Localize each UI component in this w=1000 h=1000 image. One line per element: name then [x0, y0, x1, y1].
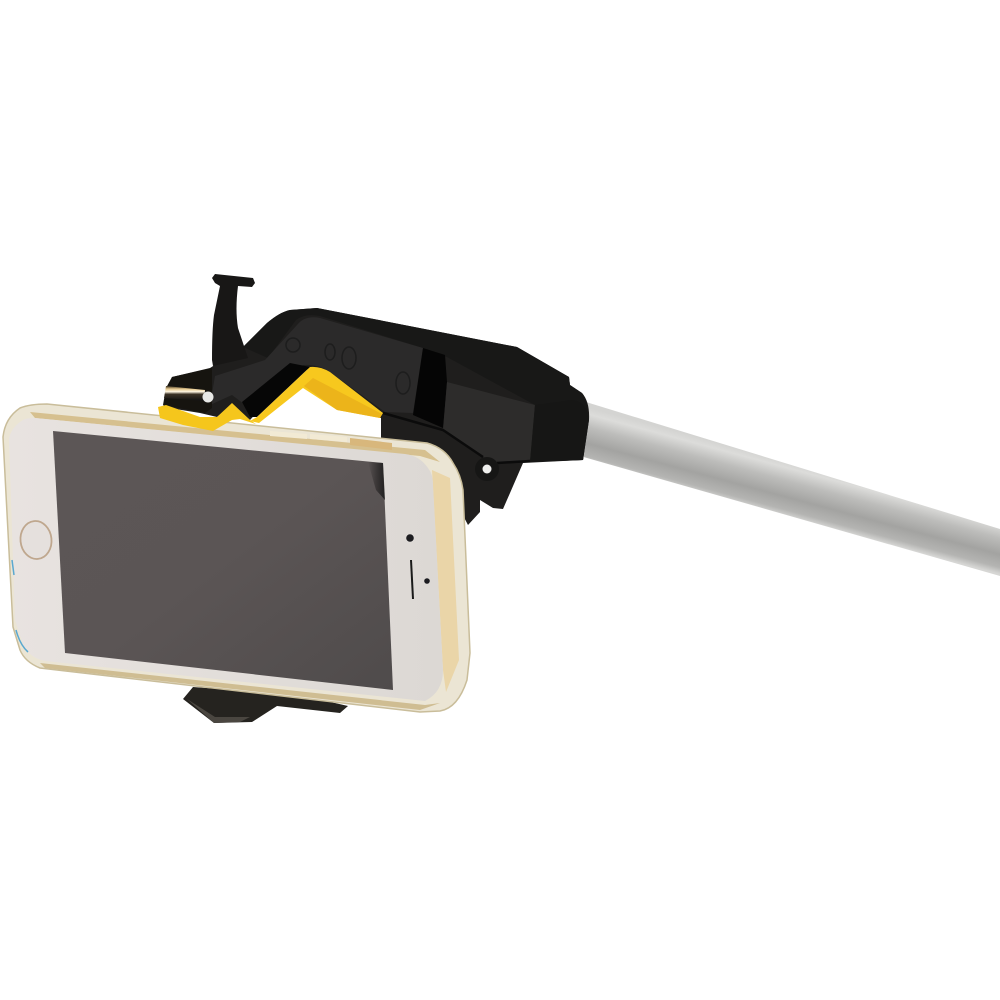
case right tint [432, 470, 459, 692]
case top highlight strips [270, 431, 347, 442]
yellow spring pad [250, 367, 383, 423]
case top tint [30, 412, 440, 462]
clamp top ridge [243, 308, 589, 462]
arm inner gap [242, 363, 310, 417]
pivot pin front [202, 392, 214, 402]
clamp side panel [443, 382, 535, 463]
panel moulding marks [286, 338, 410, 394]
proximity sensor [424, 578, 430, 584]
phone [3, 404, 470, 712]
gap under yellow pad [257, 388, 381, 442]
black clamp body [163, 308, 589, 525]
lower ridge line [383, 413, 530, 463]
front camera [406, 534, 414, 542]
screen [53, 431, 393, 690]
T-shaped release tab [212, 274, 255, 366]
lower clip behind phone [183, 687, 348, 723]
clamp recess [413, 348, 447, 428]
rear collar [530, 400, 588, 462]
clamp main shell [163, 308, 589, 525]
clamp jaw tip with metal strip [163, 368, 212, 413]
yellow jaw pad [158, 403, 256, 431]
clear case [3, 404, 470, 712]
home button [19, 519, 53, 561]
phone white front [9, 418, 443, 701]
case bottom tint [40, 663, 440, 710]
case blue reflections [12, 560, 28, 652]
case tan patch [350, 438, 392, 450]
screen corner shadow [368, 462, 385, 500]
aluminium pole [580, 402, 1000, 576]
pivot pin rear [475, 457, 499, 481]
earpiece speaker [410, 560, 414, 599]
clamp inner panel [210, 317, 423, 413]
